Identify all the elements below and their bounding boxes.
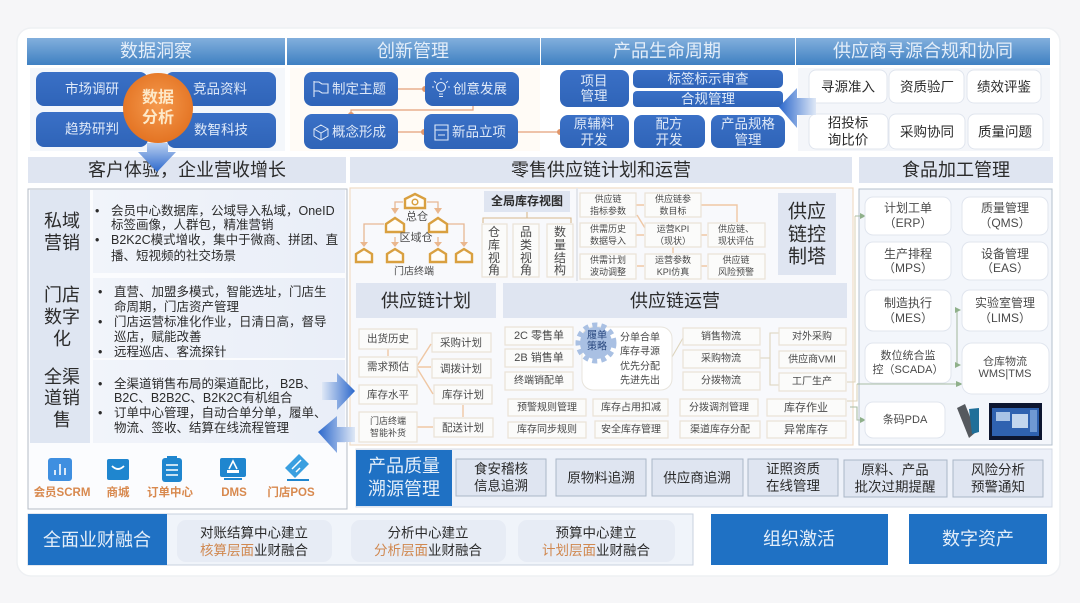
tile: procurement collaboration: 采购协同 (900, 124, 954, 140)
box: expiry reminder: 批次过期提醒 (854, 480, 936, 494)
diagram: control tower flow: 运营KPI (657, 223, 689, 234)
icon: store POS (267, 454, 315, 499)
diagram: warehouse network (356, 194, 472, 278)
diagram: control tower flow: 供应链、 (718, 223, 754, 234)
tile: ERP: （ERP） (884, 216, 932, 230)
icon: mall (106, 459, 130, 499)
tile: sourcing admission (809, 70, 887, 103)
diagram: control tower flow: 现状评估 (718, 235, 754, 246)
planning flow (359, 329, 493, 442)
box: expiry reminder: 原料、产品 (861, 462, 929, 478)
planning flow: 配送计划 (442, 421, 484, 434)
button: project management: 项目 (580, 74, 608, 88)
planning flow: 智能补货 (370, 427, 406, 438)
button: idea development: 创意发展 (453, 80, 507, 96)
supply chain control tower (778, 193, 836, 275)
button: project management (560, 70, 629, 107)
button: compliance: 合规管理 (681, 92, 735, 106)
row: store digitalization: 远程巡店、客流探针 (114, 344, 227, 359)
row: omnichannel sales: 全渠 (44, 367, 80, 387)
box: risk warning (953, 460, 1043, 497)
button: define theme (304, 72, 398, 106)
button: idea development (425, 72, 519, 106)
box: supplier trace: 供应商追溯 (663, 470, 731, 486)
tile: WMS TMS: 仓库物流 (983, 354, 1027, 368)
diagram: control tower flow: 供应链 (594, 193, 622, 204)
box: risk warning: 风险分析 (971, 462, 1025, 478)
panel: supplier sourcing (796, 38, 1050, 151)
panel: product lifecycle (541, 38, 795, 148)
connectors: food processing (850, 213, 963, 423)
diagram: control tower flow: 供需历史 (590, 223, 626, 234)
button: digital technology (167, 113, 276, 148)
icon: monitor screen (989, 403, 1042, 440)
heading: innovation management (287, 38, 540, 65)
block: budget center: 计划层面业财融合 (542, 542, 650, 558)
tile: MPS: （MPS） (883, 261, 933, 275)
data analysis circle: 数据 (142, 88, 174, 106)
diagram: control tower flow: 供需计划 (590, 254, 626, 265)
diagram: control tower flow: 运营参数 (655, 254, 691, 265)
operations flow: 对外采购 (792, 330, 832, 342)
heading: data insight (27, 38, 285, 65)
box: expiry reminder (844, 460, 947, 497)
global inventory view: 品 (520, 225, 532, 239)
button: concept formation: 概念形成 (332, 124, 386, 140)
row: store digitalization: 数字 (44, 307, 80, 327)
diagram: control tower flow: 数目标 (659, 205, 687, 216)
button: product specification: 产品规格 (721, 116, 775, 132)
row: omnichannel sales: 全渠道销售布局的渠道配比， B2B、 (114, 376, 316, 391)
row: store digitalization: 门店运营标准化作业，日清日高，督导 (114, 314, 327, 329)
operations flow: 销售物流 (701, 330, 741, 342)
supply chain control tower: 制塔 (788, 246, 826, 268)
button: compliance (633, 91, 783, 107)
tile: MES: （MES） (883, 311, 933, 325)
operations flow: 库存作业 (784, 400, 828, 414)
panel: food processing (850, 189, 1052, 445)
arrow: supplier to product lifecycle (779, 88, 816, 128)
button: new product launch (424, 114, 518, 149)
diagram: control tower flow: （现状） (655, 235, 691, 246)
connectors: innovation flow (348, 86, 563, 135)
operations flow: 预警规则管理 (517, 400, 577, 414)
tile: LIMS: 实验室管理 (975, 295, 1035, 310)
button: raw material development: 开发 (580, 132, 608, 148)
block: reconciliation center (177, 520, 332, 562)
tile: bidding: 招投标 (828, 116, 868, 130)
global inventory view: 全局库存视图 (491, 193, 563, 208)
block: organization activation (711, 514, 888, 565)
label column (30, 190, 90, 443)
row: store digitalization: 化 (53, 329, 71, 349)
button: concept formation (304, 114, 398, 149)
heading: supplier sourcing: 供应商寻源合规和协同 (833, 41, 1013, 61)
heading: product quality traceability (356, 450, 452, 506)
icon: member SCRM (34, 458, 90, 499)
heading: business finance integration (28, 514, 167, 565)
block: budget center: 预算中心建立 (556, 526, 636, 540)
diagram: warehouse network: 门店终端 (394, 264, 434, 278)
global inventory view: 角 (488, 263, 500, 277)
diagram: control tower flow: 供应链参 (655, 193, 691, 204)
block: digital assets: 数字资产 (942, 529, 1014, 549)
row: store digitalization: 门店 (44, 285, 80, 305)
data analysis circle (123, 73, 193, 143)
box: food safety audit: 信息追溯 (474, 478, 528, 494)
block: analysis center: 分析中心建立 (388, 526, 468, 540)
tile: barcode PDA: 条码PDA (883, 412, 928, 426)
planning flow: 门店终端 (370, 415, 406, 426)
box: license management (748, 459, 838, 496)
divider (576, 188, 578, 281)
row: omnichannel sales: 订单中心管理，自动合单分单，履单、 (114, 405, 327, 420)
heading: food processing (859, 157, 1053, 183)
operations flow: 2B 销售单 (514, 350, 564, 364)
planning flow: 库存计划 (442, 388, 484, 401)
row: store digitalization: 命周期，门店资产管理 (114, 299, 240, 314)
button: competitor data (165, 72, 276, 106)
panel: innovation management (287, 38, 563, 151)
icon: DMS: DMS (221, 487, 247, 499)
operations flow: 分拨物流 (701, 374, 741, 386)
heading: supply chain operations: 供应链运营 (630, 291, 720, 311)
box: license management: 在线管理 (766, 478, 820, 494)
row: private domain marketing: 会员中心数据库，公域导入私域，OneID (111, 203, 335, 218)
arrow: omnichannel to planning (322, 373, 355, 410)
panel: business finance integration (28, 514, 693, 565)
button: product specification (711, 115, 785, 148)
tile: sourcing admission: 寻源准入 (821, 80, 875, 94)
heading: retail supply chain (350, 157, 852, 183)
row: omnichannel sales: B2C、B2B2C、B2K2C有机组合 (114, 390, 293, 405)
box: supplier trace (652, 459, 743, 496)
tile: SCADA (865, 343, 951, 383)
global inventory view (482, 191, 573, 277)
planning flow: 库存水平 (367, 388, 409, 401)
planning flow: 调拨计划 (440, 362, 482, 375)
row: store digitalization: • (98, 285, 102, 299)
box: food safety audit (456, 459, 546, 496)
row: private domain marketing (44, 190, 345, 273)
heading: supply chain planning (356, 283, 496, 318)
button: raw material development (560, 115, 629, 148)
operations flow: 安全库存管理 (601, 422, 661, 436)
tile: QMS (962, 197, 1048, 235)
tile: factory audit (889, 70, 964, 103)
row: private domain marketing: 标签画像，人群包，精准营销 (111, 217, 274, 232)
tile: performance review (967, 70, 1041, 103)
planning flow: 需求预估 (367, 360, 409, 373)
operations flow: 库存占用扣减 (601, 400, 661, 414)
button: label review (633, 70, 783, 88)
panel background: innovation (290, 68, 540, 151)
heading: product lifecycle (541, 38, 795, 65)
button: market research (36, 72, 148, 106)
icon: order center: 订单中心 (147, 485, 193, 499)
panel background: supplier (798, 68, 1050, 151)
tile: MPS: 生产排程 (884, 246, 932, 261)
panel: retail supply chain (350, 188, 857, 445)
panel: product quality traceability (356, 449, 1052, 507)
icon: PDA device (957, 404, 979, 438)
tile: QMS: 质量管理 (981, 200, 1029, 215)
diagram: control tower flow: 数据导入 (590, 235, 626, 246)
tile: SCADA: 控（SCADA） (873, 362, 943, 376)
row: store digitalization (44, 278, 345, 359)
global inventory view: 库 (488, 237, 500, 252)
diagram: warehouse network: 总仓 (406, 209, 428, 223)
global inventory view: 仓 (488, 225, 500, 239)
supply chain control tower: 供应 (788, 200, 826, 222)
planning flow: 出货历史 (367, 332, 409, 345)
diagram: control tower flow: 指标参数 (590, 205, 626, 216)
tile: bidding: 询比价 (828, 132, 869, 148)
row: private domain marketing: • (95, 204, 99, 218)
button: competitor data: 竞品资料 (193, 80, 247, 96)
operations flow (505, 216, 857, 438)
block: analysis center (351, 520, 506, 562)
operations flow: 2C 零售单 (514, 328, 564, 342)
global inventory view: 视 (488, 250, 500, 265)
row: omnichannel sales: • (98, 406, 102, 420)
button: market research: 市场调研 (65, 80, 119, 96)
row: omnichannel sales (44, 360, 345, 443)
global inventory view: 数 (554, 224, 566, 239)
block: digital assets (909, 514, 1047, 564)
box: license management: 证照资质 (766, 462, 820, 476)
row: omnichannel sales: • (98, 377, 102, 391)
global inventory view: 量 (554, 238, 566, 252)
global inventory view: 视 (520, 250, 532, 265)
row: store digitalization: • (98, 345, 102, 359)
icon: store POS: 门店POS (267, 485, 315, 499)
row: store digitalization: • (98, 315, 102, 329)
tile: quality issues: 质量问题 (978, 124, 1032, 140)
block: analysis center: 分析层面业财融合 (374, 542, 482, 558)
diagram: control tower flow: 供应链 (722, 254, 750, 265)
button: product specification: 管理 (734, 132, 762, 148)
tile: bidding (809, 114, 888, 149)
icon: DMS (220, 458, 247, 499)
box: raw material trace (556, 459, 646, 496)
button: trend analysis (36, 112, 148, 147)
operations flow: 库存同步规则 (517, 422, 577, 436)
row: store digitalization: 巡店，赋能改善 (114, 329, 202, 344)
data analysis circle: 分析 (142, 108, 174, 126)
planning flow: 采购计划 (440, 336, 482, 349)
heading: product quality traceability: 产品质量 (368, 456, 440, 476)
arrow: planning to omnichannel (318, 416, 355, 453)
row: store digitalization: 直营、加盟多模式，智能选址，门店生 (114, 284, 327, 299)
heading: supplier sourcing (796, 38, 1050, 65)
tile: quality issues (968, 114, 1043, 149)
tile: LIMS (962, 290, 1048, 331)
tile: WMS TMS: WMS|TMS (979, 368, 1031, 380)
diagram: control tower flow (580, 193, 765, 279)
button: raw material development: 原辅料 (574, 116, 615, 132)
block: reconciliation center: 对账结算中心建立 (200, 526, 308, 540)
row: private domain marketing: • (95, 233, 99, 247)
heading: business finance integration: 全面业财融合 (43, 530, 151, 550)
panel: customer growth (28, 189, 347, 509)
operations flow: 渠道库存分配 (690, 422, 750, 436)
tile: WMS TMS (962, 343, 1049, 394)
row: private domain marketing: B2K2C模式增收，集中于微商、拼团、直 (111, 232, 338, 247)
global inventory view: 类 (520, 238, 532, 252)
button: digital technology: 数智科技 (194, 122, 248, 138)
tile: MES (865, 290, 951, 331)
button: trend analysis: 趋势研判 (65, 122, 119, 136)
tile: LIMS: （LIMS） (979, 311, 1031, 325)
icon: order strategy gear: 策略 (587, 340, 607, 352)
tile: barcode PDA (865, 402, 945, 438)
button: define theme: 制定主题 (332, 82, 386, 96)
tile: MES: 制造执行 (884, 296, 932, 310)
global inventory view: 角 (520, 263, 532, 277)
block: reconciliation center: 核算层面业财融合 (200, 542, 308, 558)
heading: food processing: 食品加工管理 (902, 160, 1010, 180)
tile: factory audit: 资质验厂 (900, 80, 954, 94)
heading: data insight: 数据洞察 (120, 41, 192, 61)
diagram: control tower flow: KPI仿真 (657, 266, 689, 277)
icon: mall: 商城 (106, 485, 130, 499)
row: private domain marketing: 播、短视频的社交场景 (111, 248, 236, 263)
icon: member SCRM: 会员SCRM (34, 485, 90, 499)
row: omnichannel sales: 售 (53, 410, 71, 430)
operations flow: 采购物流 (701, 352, 741, 364)
button: formula development: 开发 (656, 132, 683, 148)
operations flow: 供应商VMI (788, 352, 836, 366)
global inventory view: 构 (554, 262, 566, 277)
button: formula development (634, 115, 705, 148)
operations flow: 库存寻源 (620, 344, 660, 358)
button: formula development: 配方 (656, 116, 682, 132)
heading: innovation management: 创新管理 (377, 41, 449, 61)
button: new product launch: 新品立项 (452, 124, 506, 140)
button: project management: 管理 (580, 88, 608, 104)
operations flow: 优先分配 (620, 360, 660, 372)
button: label review: 标签标示审查 (668, 70, 749, 86)
diagram: control tower flow: 风险预警 (718, 266, 754, 277)
tile: performance review: 绩效评鉴 (977, 80, 1031, 94)
tile: EAS (962, 242, 1048, 280)
supply chain control tower: 链控 (788, 224, 826, 246)
row: private domain marketing: 私域 (44, 211, 80, 231)
panel background: data insight (30, 68, 285, 151)
heading: supply chain operations (503, 283, 847, 318)
tile: MPS (865, 242, 951, 280)
block: organization activation: 组织激活 (763, 529, 835, 549)
heading: customer experience (28, 157, 346, 183)
tile: QMS: （QMS） (979, 216, 1031, 230)
icon: order strategy gear: 履单 (587, 330, 607, 342)
operations flow: 分拨调剂管理 (689, 400, 749, 414)
diagram: warehouse network: 区域仓 (400, 230, 432, 244)
heading: product quality traceability: 溯源管理 (368, 479, 440, 499)
data analysis arrow (138, 143, 176, 172)
operations flow: 工厂生产 (792, 374, 832, 388)
row: omnichannel sales: 道销 (44, 388, 80, 408)
tile: ERP (865, 197, 951, 235)
box: food safety audit: 食安稽核 (474, 460, 528, 476)
diagram: control tower flow: 波动调整 (590, 266, 626, 277)
row: private domain marketing: 营销 (44, 233, 80, 253)
icon: order center (147, 456, 193, 499)
row: omnichannel sales: 物流、签收、结算在线流程管理 (114, 420, 290, 435)
box: raw material trace: 原物料追溯 (567, 470, 635, 486)
heading: customer experience: 客户体验，企业营收增长 (88, 160, 286, 180)
heading: supply chain planning: 供应链计划 (381, 291, 471, 311)
tile: EAS: （EAS） (981, 261, 1029, 275)
operations flow: 分单合单 (620, 330, 660, 344)
operations flow: 先进先出 (620, 374, 660, 386)
box: risk warning: 预警通知 (971, 478, 1025, 494)
heading: retail supply chain: 零售供应链计划和运营 (511, 160, 691, 180)
global inventory view: 结 (554, 251, 566, 265)
icon: order strategy gear (578, 325, 614, 361)
block: budget center (518, 520, 675, 562)
operations flow: 异常库存 (784, 422, 828, 436)
panel: data insight (27, 38, 285, 151)
tile: SCADA: 数位统合监 (880, 348, 936, 362)
heading: product lifecycle: 产品生命周期 (613, 41, 721, 61)
operations flow: 终端销配单 (514, 374, 564, 386)
tile: procurement collaboration (889, 114, 965, 149)
tile: EAS: 设备管理 (981, 246, 1029, 261)
tile: ERP: 计划工单 (884, 201, 932, 215)
